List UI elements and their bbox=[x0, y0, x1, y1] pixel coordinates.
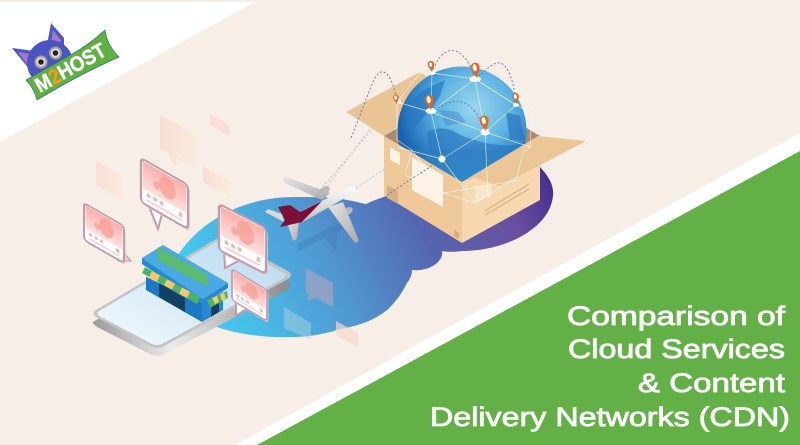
dashed flight arcs bbox=[350, 50, 516, 195]
cardboard box back flaps bbox=[346, 72, 540, 182]
pin: Europe bbox=[424, 94, 436, 114]
title line 4: Delivery Networks (CDN) bbox=[430, 402, 790, 432]
box body bbox=[384, 136, 586, 243]
pin: north-west bbox=[427, 60, 436, 75]
plane wing far bbox=[283, 177, 330, 200]
speech card 3 bbox=[219, 204, 268, 277]
green corner panel bbox=[257, 151, 800, 445]
storefront bbox=[142, 245, 228, 322]
pin: east bbox=[512, 92, 520, 107]
faded card: on blob centre bbox=[306, 268, 333, 307]
plane wing near bbox=[328, 202, 359, 243]
faded card: left bbox=[96, 161, 127, 198]
faded background speech cards bbox=[96, 114, 358, 347]
plane maroon tail bbox=[278, 201, 322, 227]
box interior bbox=[384, 90, 540, 182]
box label bbox=[412, 157, 443, 207]
box right face bbox=[462, 140, 540, 243]
store sign bbox=[157, 247, 208, 287]
location pins bbox=[393, 60, 520, 136]
logo wordmark: M2HOST bbox=[31, 39, 110, 97]
plane fuselage bbox=[285, 186, 356, 222]
title line 1: Comparison of bbox=[567, 301, 786, 331]
logo banner bbox=[26, 30, 119, 100]
store roof bbox=[142, 245, 228, 299]
faded card: middle bbox=[203, 166, 231, 197]
faded card: top large bbox=[160, 115, 196, 169]
icon: monster head bbox=[27, 40, 73, 86]
icon: monster ears bbox=[12, 23, 64, 70]
pin: centre bbox=[479, 115, 490, 136]
network node bbox=[438, 156, 446, 162]
faded card: blob edge bbox=[336, 321, 358, 347]
airplane bbox=[265, 177, 359, 252]
logo: M2HOST bbox=[12, 23, 119, 100]
box print lines bbox=[485, 184, 529, 215]
box left face bbox=[384, 136, 462, 243]
pin: west bbox=[393, 94, 401, 104]
white corner triangle bbox=[0, 2, 255, 142]
speech card 1 bbox=[84, 203, 131, 265]
title line 3: & Content bbox=[638, 368, 786, 398]
store door bbox=[159, 283, 185, 312]
globe sphere bbox=[398, 66, 526, 182]
store awning front bbox=[142, 267, 200, 304]
plane shadow bbox=[297, 222, 355, 252]
plane tail stabilizers bbox=[265, 209, 299, 241]
phone rim bbox=[94, 238, 291, 348]
store walls bbox=[146, 277, 202, 322]
icon: monster eyes bbox=[34, 46, 62, 68]
phone screen bbox=[98, 240, 286, 345]
network mesh bbox=[397, 73, 532, 203]
speech card 4 bbox=[232, 269, 268, 323]
speech card 2 bbox=[141, 158, 190, 232]
box left flap bbox=[346, 72, 450, 136]
box barcode bbox=[387, 185, 398, 204]
phone body bbox=[93, 246, 290, 356]
box corner mark bbox=[454, 230, 459, 239]
blue cloud blob bbox=[177, 167, 553, 337]
box right flap bbox=[462, 136, 586, 186]
faded card: on blob bottom bbox=[284, 307, 311, 340]
dashed routes to plane bbox=[320, 102, 442, 190]
title bbox=[430, 301, 790, 432]
pin: north bbox=[469, 62, 481, 82]
title line 2: Cloud Services bbox=[568, 334, 785, 364]
store side door bbox=[211, 301, 219, 317]
globe land masses bbox=[405, 80, 526, 182]
store awning side bbox=[207, 291, 228, 308]
box small label bbox=[390, 147, 400, 165]
white diagonal band bbox=[235, 133, 800, 445]
box front patch bbox=[475, 184, 492, 203]
plane engines bbox=[319, 184, 354, 217]
globe bbox=[398, 66, 526, 182]
phone bbox=[93, 238, 291, 356]
faded card: top small bbox=[210, 114, 229, 136]
globe lower shade bbox=[410, 151, 489, 182]
